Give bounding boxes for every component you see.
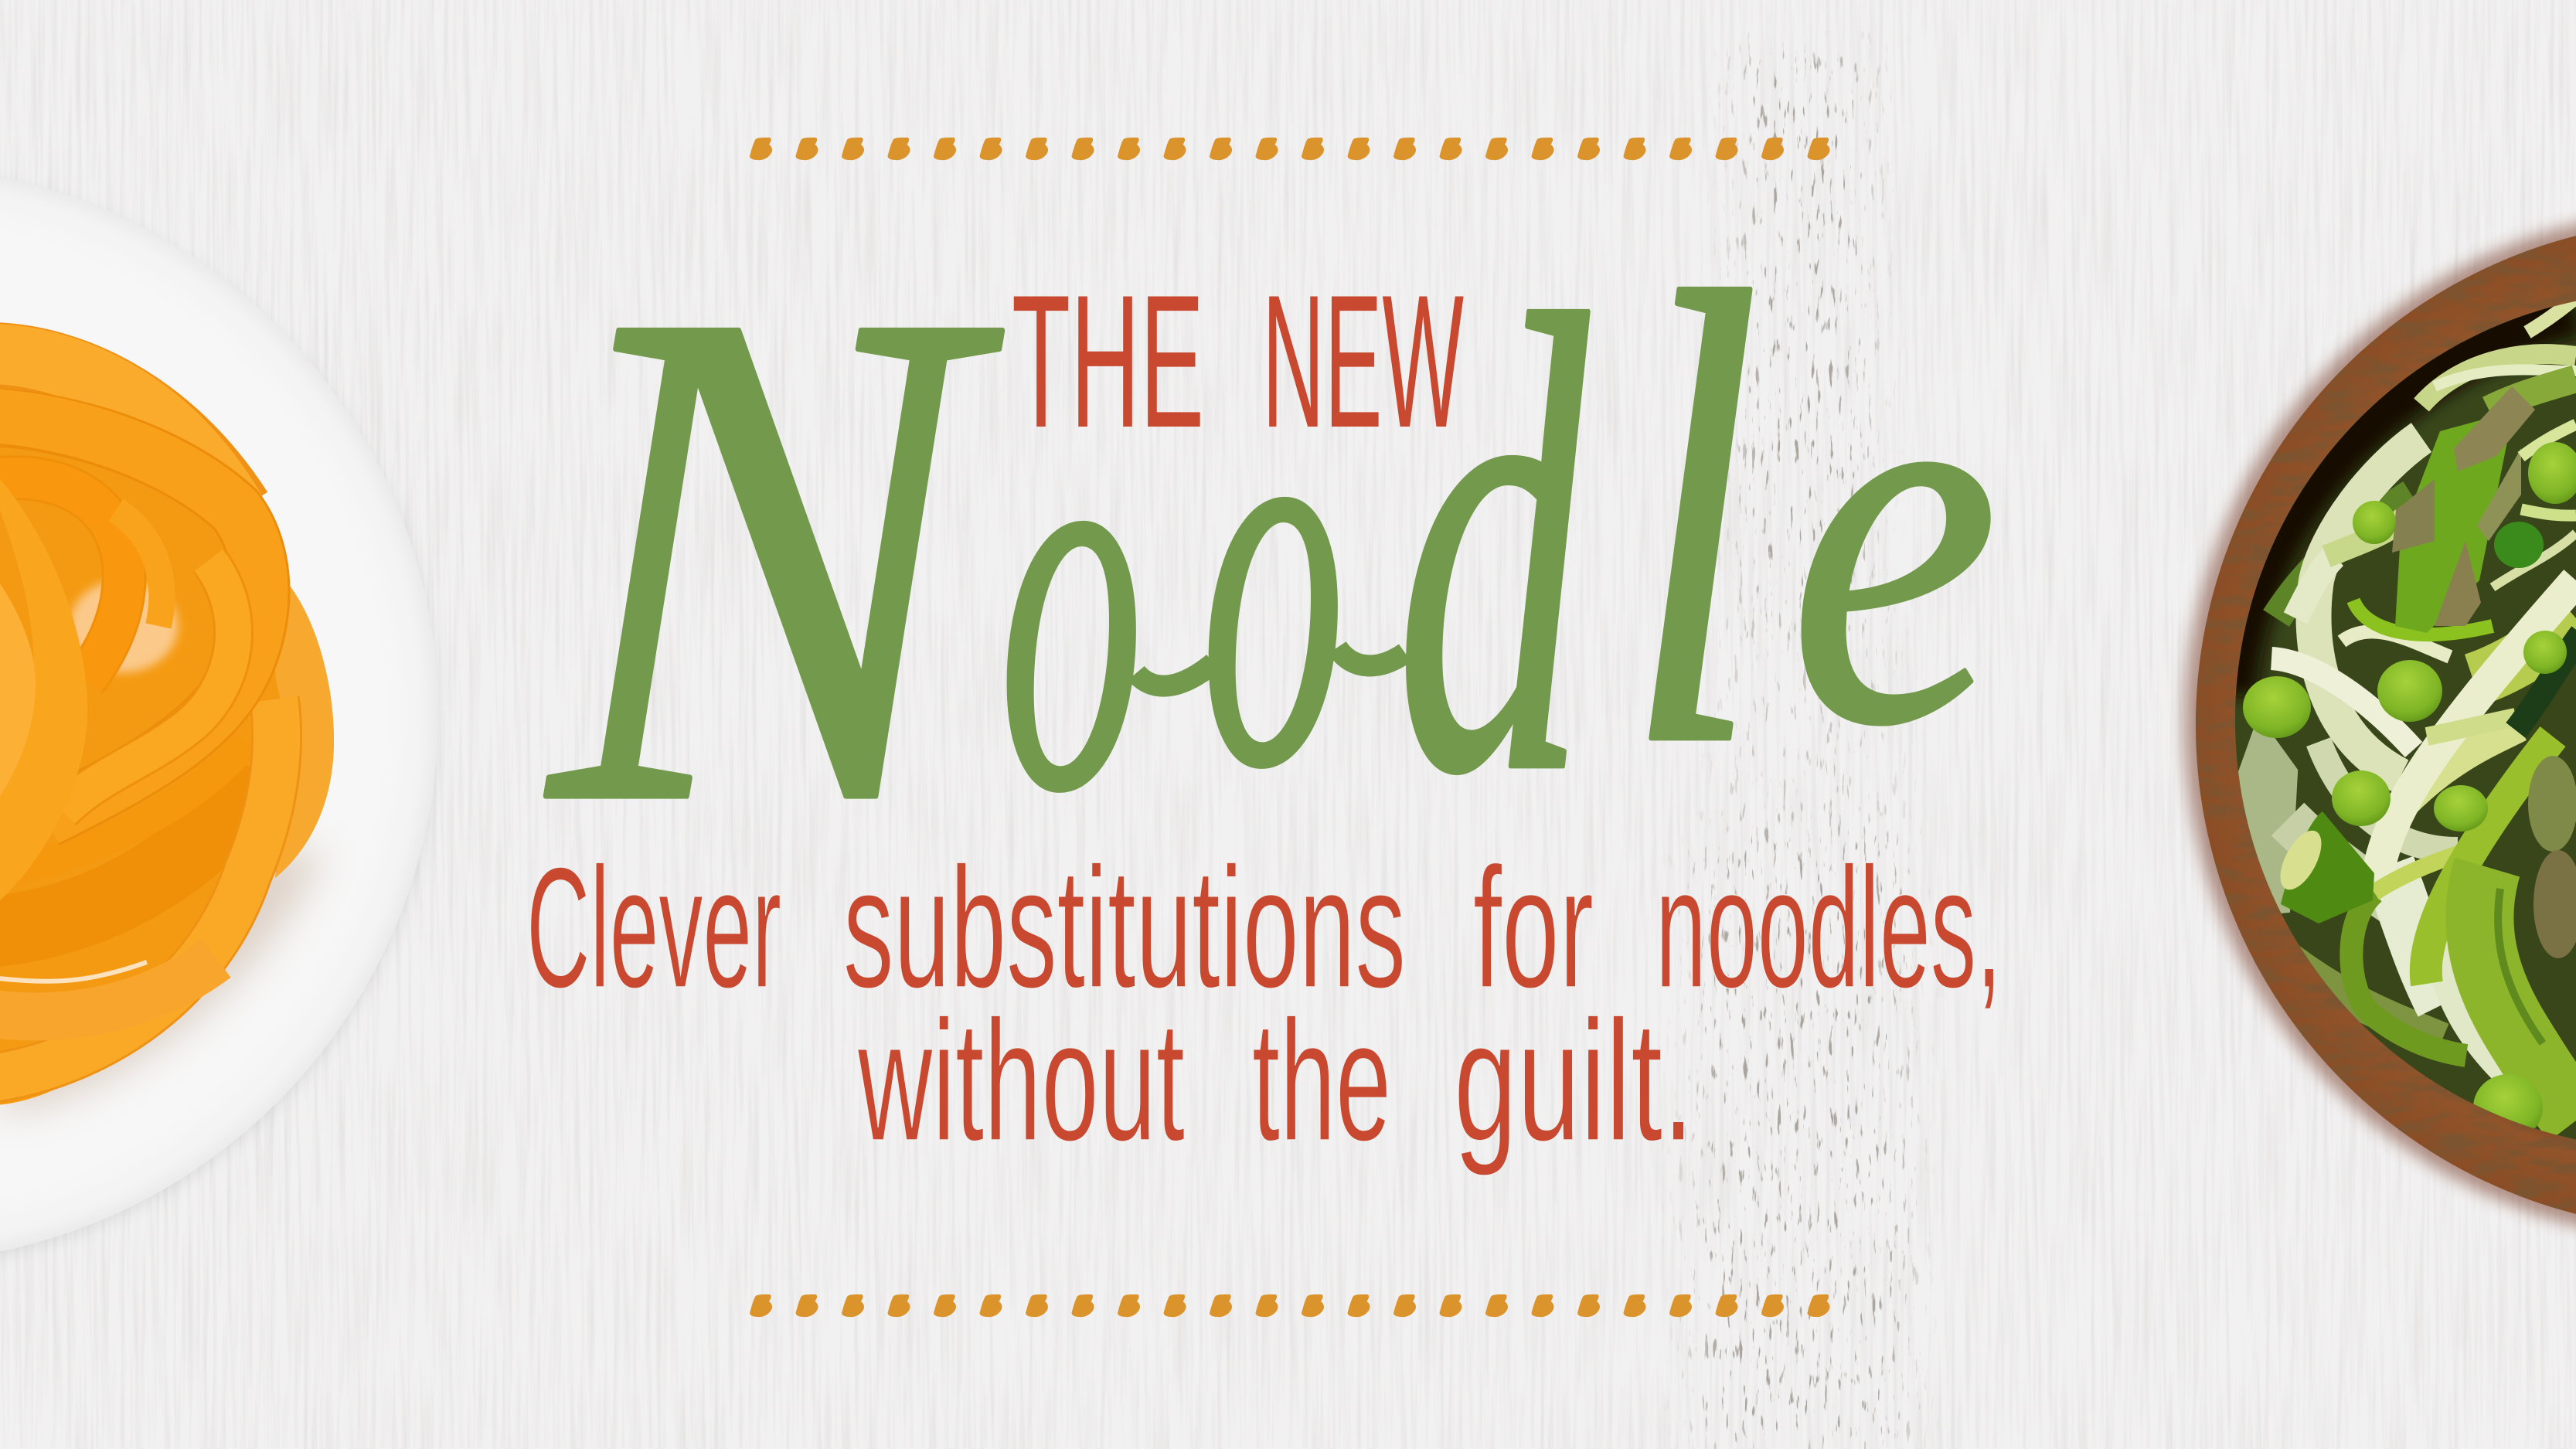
title: Noodle: o [999,291,1143,906]
bowl interior and vegetables [2226,286,2576,1159]
title: Noodle: d [1396,183,1594,908]
title: Noodle: l [1625,162,1761,878]
plate [0,165,438,1263]
title: THE NEW: THE [1012,255,1204,467]
photo: white plate with carrot noodles [0,165,438,1266]
title: Noodle: N [540,163,1006,951]
title: Noodle [540,162,1999,951]
asparagus spear [2395,411,2513,633]
subtitle line 1: for [1473,832,1594,1024]
photo: wooden bowl with zucchini noodles [2184,209,2576,1241]
title: Noodle: e [1788,236,1999,836]
carrot shadow on plate [0,850,325,1113]
rim wood grain [2187,216,2576,1236]
dotted rule: top [750,138,1830,160]
subtitle line 1: Clever [526,832,781,1024]
bowl reddish halo [2184,209,2576,1241]
subtitle line 1: noodles, [1656,832,2002,1024]
peas [2243,442,2576,1141]
subtitle line 2 [857,985,1694,1177]
subtitle line 2: guilt. [1454,985,1694,1177]
asparagus cut piece [2281,811,2374,923]
subtitle line 2: without [857,985,1185,1177]
subtitle line 2: the [1252,985,1391,1177]
subtitle line 1: substitutions [843,832,1406,1024]
subtitle line 1 [526,832,2002,1024]
plate shadow [0,172,437,1266]
text: NEW [1262,255,1464,467]
bowl rim [2196,220,2576,1230]
asparagus tip right [2528,756,2576,852]
dotted rule: bottom [750,1294,1830,1317]
carrot noodles [0,322,334,1105]
title: Noodle: o [1201,267,1345,883]
